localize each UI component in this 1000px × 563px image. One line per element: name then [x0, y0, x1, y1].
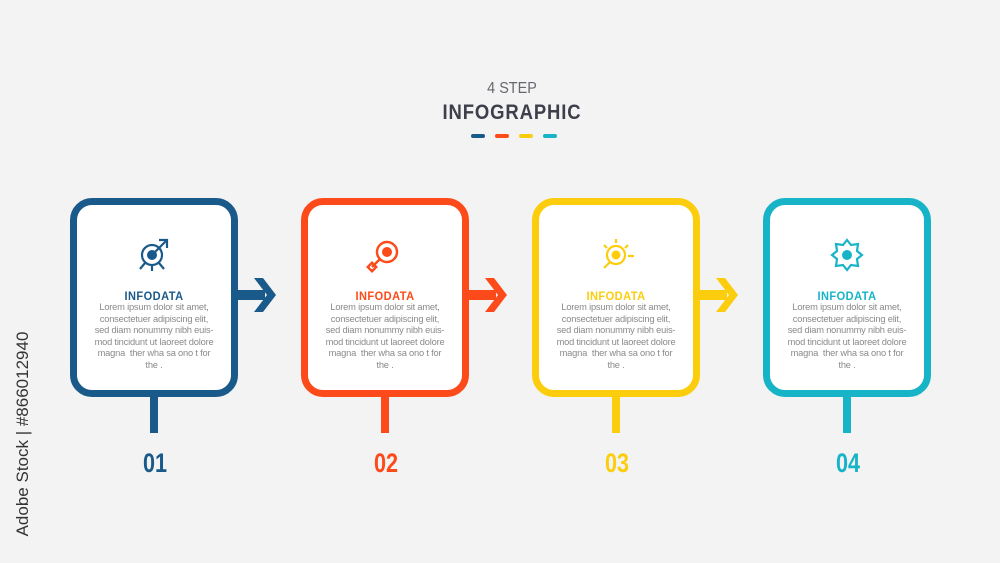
box 1: the .: [145, 360, 163, 370]
box 3: [532, 198, 700, 397]
arrow 2: [469, 278, 507, 312]
box 2: [301, 198, 469, 397]
box 1: mod tincidunt ut laoreet dolore: [95, 336, 213, 346]
panel: step 4: [763, 198, 931, 478]
box 1: INFODATA: [124, 289, 184, 303]
box 2: INFODATA: [355, 289, 415, 303]
box 3: mod tincidunt ut laoreet dolore: [557, 336, 675, 346]
arrow 1: [238, 278, 276, 312]
panel: step 2: [301, 198, 507, 478]
panel: step 1: [70, 198, 276, 478]
box 1: sed diam nonummy nibh euis-: [95, 325, 213, 335]
panel: step 3: [532, 198, 738, 478]
box 4: magna ther wha sa ono t for: [791, 348, 903, 358]
arrow 3: [700, 278, 738, 312]
box 1: consectetuer adipiscing elit,: [100, 314, 208, 324]
title: 4 STEP: [487, 80, 537, 97]
box 2: sed diam nonummy nibh euis-: [326, 325, 444, 335]
box 3: Lorem ipsum dolor sit amet,: [561, 302, 671, 312]
box 1: Lorem ipsum dolor sit amet,: [99, 302, 209, 312]
watermark side text: Adobe Stock | #866012940: [13, 332, 32, 536]
box 3: the .: [607, 360, 625, 370]
stem 3: [612, 397, 620, 433]
box 4: mod tincidunt ut laoreet dolore: [788, 336, 906, 346]
icon: gear: [830, 238, 864, 272]
box 2: consectetuer adipiscing elit,: [331, 314, 439, 324]
box 4: INFODATA: [817, 289, 877, 303]
icon: target: [139, 238, 168, 271]
icon: magnifier: [366, 240, 398, 273]
box 4: Lorem ipsum dolor sit amet,: [792, 302, 902, 312]
number 04: 04: [836, 448, 860, 478]
stem 4: [843, 397, 851, 433]
box 3: sed diam nonummy nibh euis-: [557, 325, 675, 335]
stem 1: [150, 397, 158, 433]
stem 2: [381, 397, 389, 433]
title: INFOGRAPHIC: [442, 101, 582, 124]
icon: bulb idea: [603, 239, 634, 269]
box 4: [763, 198, 931, 397]
box 2: Lorem ipsum dolor sit amet,: [330, 302, 440, 312]
box 2: the .: [376, 360, 394, 370]
number 03: 03: [605, 448, 629, 478]
box 3: magna ther wha sa ono t for: [560, 348, 672, 358]
box 2: magna ther wha sa ono t for: [329, 348, 441, 358]
number 01: 01: [143, 448, 167, 478]
number 02: 02: [374, 448, 398, 478]
box 4: consectetuer adipiscing elit,: [793, 314, 901, 324]
color dashes: [471, 134, 557, 138]
box 1: [70, 198, 238, 397]
box 3: INFODATA: [586, 289, 646, 303]
box 3: consectetuer adipiscing elit,: [562, 314, 670, 324]
box 4: the .: [838, 360, 856, 370]
box 2: mod tincidunt ut laoreet dolore: [326, 336, 444, 346]
title: [442, 80, 582, 124]
box 1: magna ther wha sa ono t for: [98, 348, 210, 358]
box 4: sed diam nonummy nibh euis-: [788, 325, 906, 335]
